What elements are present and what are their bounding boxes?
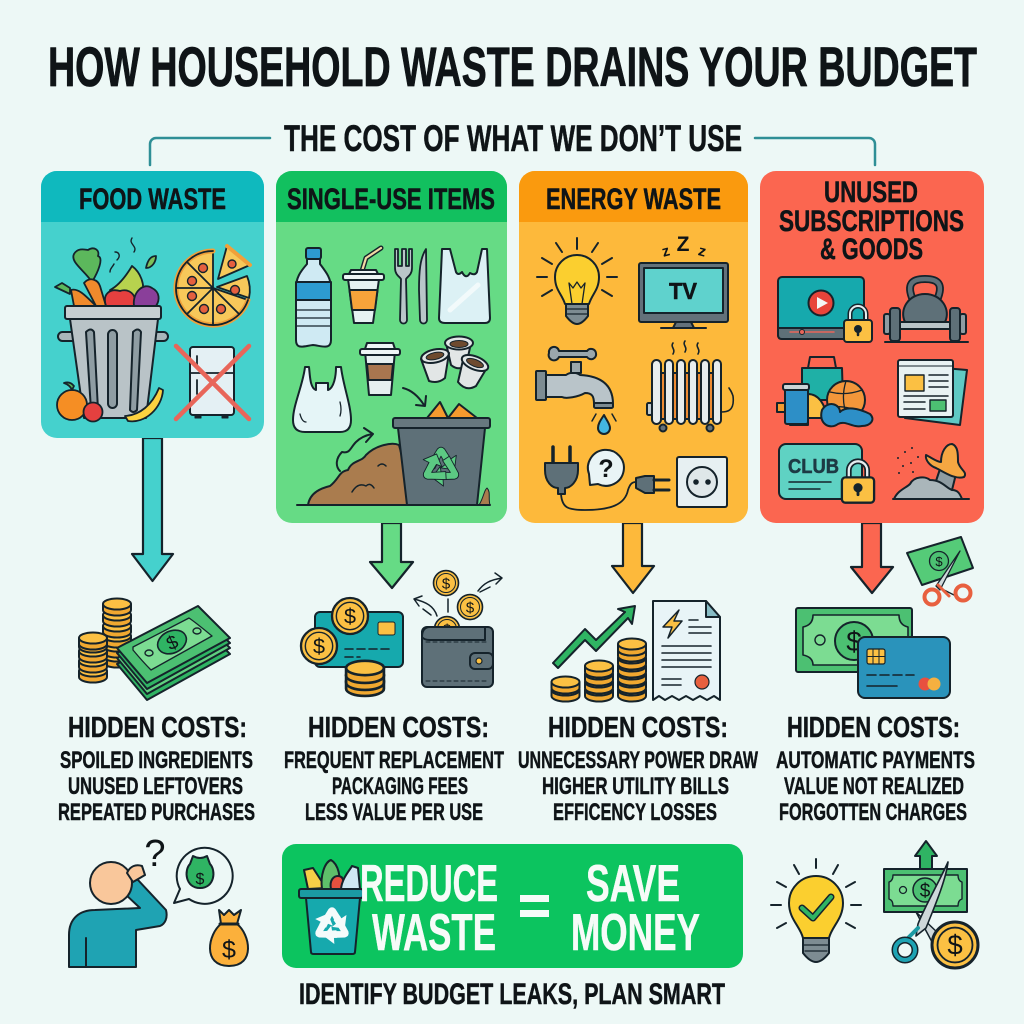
large bill: [796, 608, 912, 672]
text block: energy hidden costs: HIDDEN COSTS:: [548, 712, 728, 744]
icon: newspapers: [898, 360, 967, 425]
icon: dripping faucet: [536, 347, 616, 434]
icon: bulb with check: [771, 859, 861, 962]
text block: food waste hidden costs: SPOILED INGREDIENTS: [60, 747, 253, 774]
thought bubble with money bag: $: [196, 871, 205, 888]
rising coin stacks: [552, 638, 646, 702]
icon: locked video streaming: [778, 277, 872, 342]
icon: shopping goods: [777, 357, 872, 426]
text block: food waste hidden costs: [58, 712, 255, 826]
arrow: subscriptions down: [851, 523, 893, 593]
icon: plastic bag top: [439, 249, 490, 323]
icon: vegetables on top of bin: [55, 238, 159, 306]
text block: energy hidden costs: UNNECESSARY POWER DRAW: [518, 747, 758, 774]
cut bill with scissors: [907, 537, 973, 604]
icon: kettlebell and dumbbell: [884, 279, 968, 342]
panel: unused subscriptions and goods: [760, 171, 984, 523]
wallet with flying coins: [414, 570, 502, 687]
arrow: single-use down: [370, 523, 413, 588]
cash bundle: $: [163, 631, 182, 655]
text: save money: [571, 855, 700, 962]
icon: dusty pile and hat: [893, 444, 969, 499]
person: [69, 862, 167, 967]
orange money bag: $: [222, 936, 236, 964]
equals sign: [520, 895, 549, 917]
cash bundle: [117, 606, 230, 700]
text block: energy hidden costs: EFFICENCY LOSSES: [553, 799, 717, 826]
icon: plug, cord and socket: [545, 447, 727, 510]
icon: scissors cutting bill with coin: $: [920, 881, 931, 902]
icon: plug, cord and socket: ?: [598, 455, 614, 483]
heading: unused subscriptions and goods: SUBSCRIPTIONS: [779, 205, 964, 238]
icon: cup with straw: [343, 248, 384, 323]
text block: subscriptions hidden costs: HIDDEN COSTS:: [787, 712, 960, 744]
text block: single-use hidden costs: HIDDEN COSTS:: [308, 712, 489, 744]
icon: confused person thinking about money: [69, 833, 248, 967]
blue credit card: [858, 637, 950, 698]
large bill: $: [846, 626, 862, 657]
text: reduce waste: [360, 855, 498, 962]
icon: trash can: [58, 306, 168, 418]
text block: single-use hidden costs: PACKAGING FEES: [332, 773, 468, 800]
icon: landfill pile and recycling bin: [297, 388, 490, 505]
text: save money: MONEY: [571, 904, 700, 962]
icon: rising bills chart and utility bill: [552, 601, 720, 702]
icon: TV with zzz: Z: [677, 233, 690, 256]
icon: credit card, coins and wallet: [301, 570, 502, 696]
icon: TV with zzz: z: [660, 242, 672, 261]
text block: single-use hidden costs: [284, 712, 504, 826]
icon: scissors cutting bill with coin: [884, 841, 978, 968]
text block: single-use hidden costs: LESS VALUE PER USE: [305, 799, 483, 826]
icon: radiator: [647, 341, 733, 432]
orange money bag: [210, 910, 248, 966]
icon: TV with zzz: z: [696, 242, 708, 261]
icon: coin stacks and cash: [79, 598, 230, 700]
heading: unused subscriptions and goods: & GOODS: [820, 233, 923, 266]
heading: single-use items: SINGLE-USE ITEMS: [287, 183, 495, 216]
icon: locked club card: [779, 444, 874, 503]
thought bubble with money bag: [174, 848, 233, 904]
icon: cash and card with cut bill: [796, 537, 973, 698]
text block: energy hidden costs: [518, 712, 758, 826]
rising arrow: [553, 606, 635, 668]
question mark: ?: [144, 833, 166, 875]
text: reduce waste: WASTE: [372, 904, 496, 962]
credit card with coins: [301, 598, 403, 696]
panel: energy waste: [519, 171, 748, 523]
text block: energy hidden costs: HIGHER UTILITY BILLS: [542, 773, 729, 800]
tagline: IDENTIFY BUDGET LEAKS, PLAN SMART: [299, 978, 725, 1011]
subtitle with bracket: [150, 118, 875, 165]
arrow: energy down: [612, 523, 654, 593]
text block: food waste hidden costs: HIDDEN COSTS:: [68, 712, 247, 744]
icon: fridge crossed out: [176, 346, 249, 419]
panel: food waste: [41, 171, 264, 438]
icon: TV with zzz: [639, 233, 728, 328]
cut bill with scissors: $: [935, 554, 943, 569]
icon: coffee cup: [360, 343, 400, 395]
arrow: food waste down: [132, 438, 173, 581]
coin stacks: [79, 598, 131, 682]
heading: unused subscriptions and goods: [779, 176, 964, 266]
icon: dropped fruit: [57, 382, 163, 422]
icon: plastic bag lower: [293, 367, 351, 432]
heading: unused subscriptions and goods: UNUSED: [824, 176, 918, 209]
icon: TV with zzz: TV: [669, 278, 698, 304]
icon: recycling bin: [299, 860, 363, 954]
heading: food waste: FOOD WASTE: [79, 183, 226, 216]
icon: water bottle: [296, 248, 331, 347]
utility bill: [653, 601, 720, 700]
text block: subscriptions hidden costs: [776, 712, 975, 826]
panel: single-use items: [276, 171, 507, 523]
icon: light bulb: [537, 238, 617, 324]
text: reduce waste: REDUCE: [360, 855, 498, 913]
text block: food waste hidden costs: UNUSED LEFTOVERS: [68, 773, 243, 800]
subtitle with bracket: THE COST OF WHAT WE DON’T USE: [284, 118, 742, 159]
text: save money: SAVE: [586, 855, 680, 913]
icon: pizza: [176, 246, 250, 325]
text block: food waste hidden costs: REPEATED PURCHASES: [58, 799, 255, 826]
icon: coffee pods: [420, 336, 490, 388]
heading: energy waste: ENERGY WASTE: [546, 183, 721, 216]
text block: single-use hidden costs: FREQUENT REPLACEMENT: [284, 747, 504, 774]
banner: reduce waste equals save money: [282, 844, 743, 968]
icon: locked club card: CLUB: [788, 456, 839, 478]
icon: fork and knife: [395, 249, 427, 324]
